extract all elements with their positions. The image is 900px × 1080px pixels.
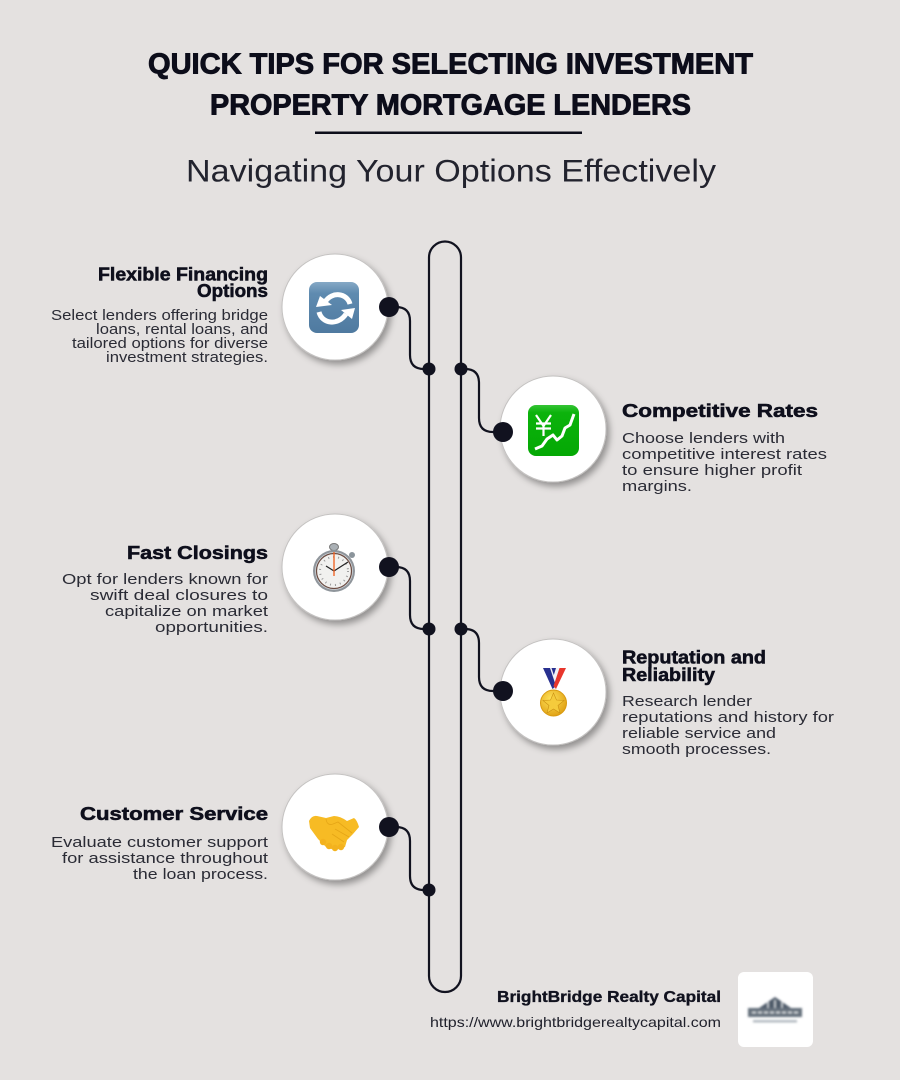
description: competitive interest rates: [622, 446, 827, 463]
description: to ensure higher profit: [622, 462, 803, 479]
panel: customer service: [51, 774, 399, 883]
title: PROPERTY MORTGAGE LENDERS: [210, 90, 691, 122]
panel: flexible financing: [51, 254, 399, 366]
node circle: [282, 514, 388, 620]
central timeline track: [429, 242, 461, 992]
panel: reputation and reliability: Reliability: [622, 665, 715, 685]
description: [51, 307, 268, 366]
description: smooth processes.: [622, 741, 771, 758]
description: swift deal closures to: [90, 587, 268, 604]
node circle: [282, 774, 388, 880]
panel: competitive rates: [493, 376, 827, 495]
connector: customer service: [389, 827, 436, 896]
node circle: [282, 254, 388, 360]
description: [622, 693, 834, 758]
connector: reputation: [454, 622, 503, 691]
description: [62, 571, 269, 636]
description: capitalize on market: [105, 603, 269, 620]
connector: competitive rates: [454, 362, 503, 432]
description: Opt for lenders known for: [62, 571, 268, 588]
description: Choose lenders with: [622, 430, 785, 447]
heading: Fast Closings: [127, 543, 268, 563]
panel: flexible financing: Options: [197, 281, 268, 301]
node circle: [500, 639, 606, 745]
heading: Competitive Rates: [622, 401, 818, 421]
description: opportunities.: [155, 619, 268, 636]
description: for assistance throughout: [62, 850, 269, 867]
description: tailored options for diverse: [72, 335, 268, 352]
footer url: https://www.brightbridgerealtycapital.com: [430, 1014, 721, 1030]
footer company name: BrightBridge Realty Capital: [497, 989, 721, 1006]
description: Select lenders offering bridge: [51, 307, 268, 324]
description: reliable service and: [622, 725, 776, 742]
logo: [738, 972, 813, 1047]
description: [51, 834, 269, 883]
icon: refresh arrows: [309, 282, 359, 333]
panel: fast closings: [62, 514, 399, 636]
icon: medal: [540, 668, 566, 716]
icon: yen chart: [528, 405, 579, 456]
icon: stopwatch: [313, 544, 355, 592]
heading: Flexible Financing: [98, 264, 268, 284]
panel: reputation and reliability: [493, 639, 834, 758]
connector: flexible financing: [389, 307, 436, 376]
description: reputations and history for: [622, 709, 834, 726]
icon: handshake: [309, 816, 359, 851]
description: loans, rental loans, and: [96, 321, 268, 338]
description: [622, 430, 827, 495]
connector: fast closings: [389, 567, 436, 636]
description: Evaluate customer support: [51, 834, 269, 851]
heading: Reputation and: [622, 648, 766, 668]
description: Research lender: [622, 693, 752, 710]
title: [148, 48, 754, 122]
subtitle: Navigating Your Options Effectively: [186, 152, 716, 188]
description: margins.: [622, 478, 692, 495]
description: the loan process.: [133, 866, 268, 883]
description: investment strategies.: [106, 349, 268, 366]
heading: Customer Service: [80, 804, 268, 824]
title: QUICK TIPS FOR SELECTING INVESTMENT: [148, 48, 754, 80]
node circle: [500, 376, 606, 482]
